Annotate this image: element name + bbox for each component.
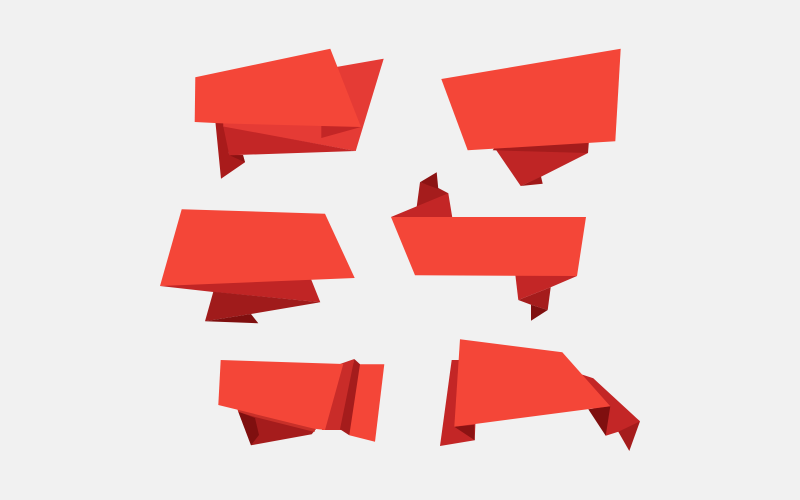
lower fold xyxy=(493,145,588,186)
right fold xyxy=(575,372,640,436)
small tip xyxy=(521,176,543,186)
main panel xyxy=(391,217,586,276)
lower fold middle xyxy=(518,287,551,310)
under fold light xyxy=(223,115,361,151)
main panel xyxy=(160,209,355,286)
top fold middle xyxy=(417,182,448,210)
lower under fold xyxy=(205,292,320,321)
under fold dark xyxy=(223,126,356,155)
top fold tip xyxy=(420,172,438,189)
inner fold triangle xyxy=(321,120,361,138)
underside shadow xyxy=(238,412,259,445)
main panel xyxy=(441,49,621,150)
banner: bottom left xyxy=(218,359,384,445)
right lower tip xyxy=(615,421,640,451)
right panel xyxy=(349,364,384,442)
fold strip xyxy=(493,140,589,153)
back right panel xyxy=(332,59,384,151)
tip shadow xyxy=(205,314,258,323)
top fold base xyxy=(391,193,453,220)
tail inner shadow xyxy=(230,155,245,162)
fold light xyxy=(322,359,354,430)
fold dark xyxy=(340,359,360,435)
underside xyxy=(238,412,316,445)
left fold xyxy=(440,360,476,446)
upper under fold xyxy=(160,274,320,302)
lower fold base xyxy=(515,272,577,300)
main panel xyxy=(454,339,610,427)
left fold shadow xyxy=(454,425,475,440)
right fold shadow xyxy=(588,406,610,436)
main panel xyxy=(218,360,343,430)
banner: middle left xyxy=(160,209,355,323)
lower fold tip xyxy=(531,305,548,321)
tail fold xyxy=(215,118,245,179)
main panel xyxy=(195,49,361,127)
banner: bottom right xyxy=(440,339,640,451)
underside strip xyxy=(236,405,316,432)
banner: middle right xyxy=(391,172,586,321)
banner: top right xyxy=(441,49,621,186)
banner: top left xyxy=(195,49,384,179)
